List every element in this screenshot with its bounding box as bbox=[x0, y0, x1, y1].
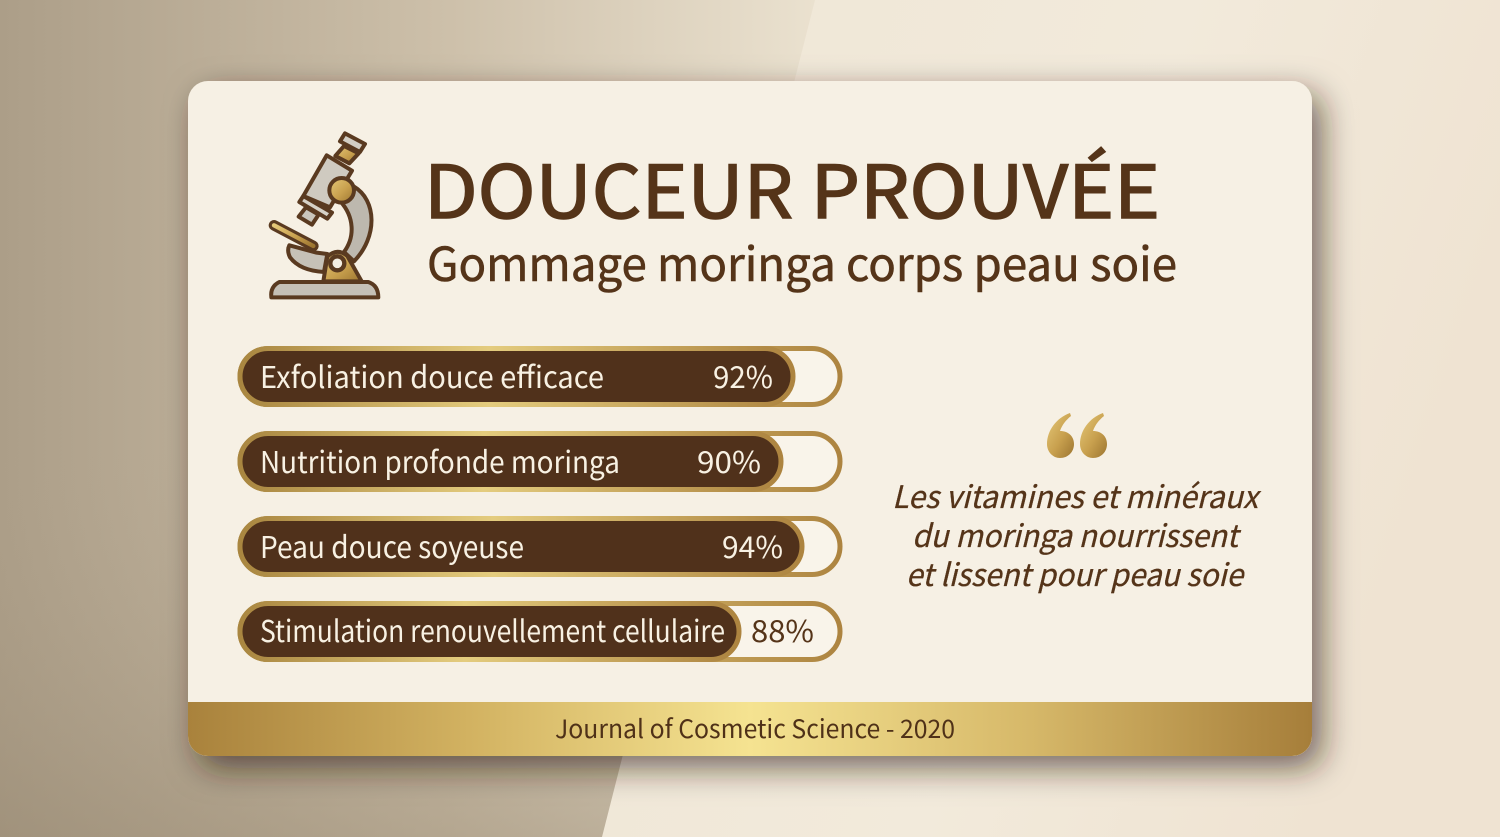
bar: nutrition 90%: 90% bbox=[697, 438, 761, 482]
bar: peau douce 94% bbox=[240, 518, 840, 574]
bar: nutrition 90%: Nutrition profonde moringa bbox=[260, 438, 620, 482]
quote text bbox=[892, 472, 1261, 595]
bar: exfoliation 92%: Exfoliation douce efficace bbox=[260, 353, 604, 397]
bar: stimulation 88%: 88% bbox=[751, 607, 814, 651]
title: DOUCEUR PROUVÉE bbox=[424, 134, 1160, 240]
bar: peau douce 94%: Peau douce soyeuse bbox=[260, 523, 524, 567]
bar: exfoliation 92%: 92% bbox=[713, 353, 773, 397]
quote text: et lissent pour peau soie bbox=[906, 550, 1246, 595]
quote text: du moringa nourrissent bbox=[912, 511, 1241, 556]
bar: nutrition 90% bbox=[240, 434, 840, 490]
source citation: Journal of Cosmetic Science - 2020 bbox=[555, 709, 955, 746]
bar: peau douce 94%: 94% bbox=[722, 523, 783, 567]
bar: stimulation 88%: Stimulation renouvellement cellulaire bbox=[260, 607, 725, 651]
icon: quotation mark bbox=[1047, 413, 1107, 458]
card panel bbox=[188, 81, 1312, 756]
footer band bbox=[188, 702, 1312, 756]
quote text: Les vitamines et minéraux bbox=[892, 472, 1261, 517]
bar: exfoliation 92% bbox=[240, 348, 840, 404]
subtitle: Gommage moringa corps peau soie bbox=[427, 226, 1177, 295]
icon: microscope bbox=[271, 133, 378, 297]
bar: stimulation 88% bbox=[240, 604, 840, 660]
